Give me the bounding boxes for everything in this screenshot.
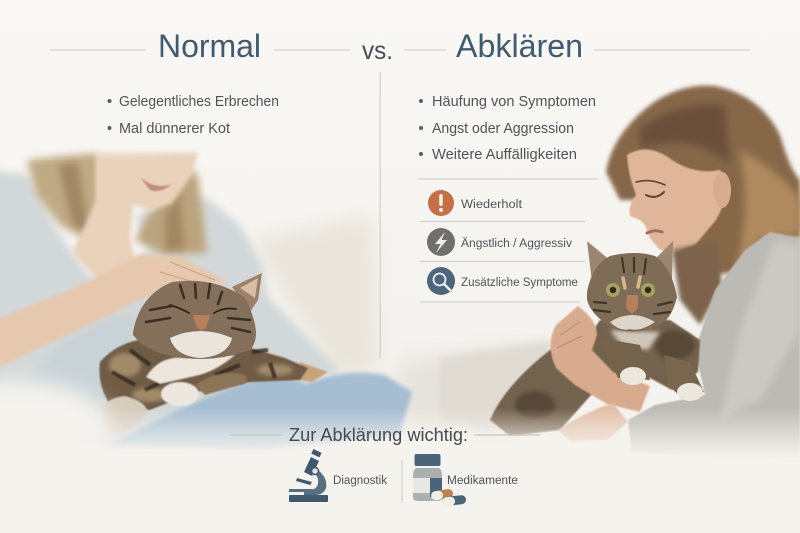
sweater light fold [720, 240, 800, 420]
closed eyes [170, 305, 236, 313]
body stripes [112, 350, 275, 390]
nose [193, 315, 210, 331]
symptom rows [418, 179, 598, 302]
label: Medikamente: Medikamente [447, 475, 518, 487]
label: Ängstlich / Aggressiv: Ängstlich / Aggressiv [461, 238, 572, 250]
finger lines [160, 262, 215, 284]
hair [27, 150, 207, 255]
title: Normal: Normal [158, 28, 261, 64]
muzzle and chin [170, 331, 232, 358]
paw front [161, 382, 199, 406]
lower hand [558, 403, 628, 441]
face [627, 150, 726, 250]
tan paw patch [300, 362, 328, 382]
dark body markings [515, 330, 695, 419]
footer rules [230, 434, 540, 436]
fog at top of the left photo [0, 110, 180, 146]
sofa [440, 340, 552, 430]
fog at lower-left corner [0, 380, 110, 470]
sweater [0, 170, 342, 450]
leg with stripes [195, 373, 247, 395]
center divider [380, 72, 381, 358]
ears [587, 241, 612, 282]
label: Wiederholt: Wiederholt [461, 199, 523, 211]
neck and hair shadow [672, 240, 722, 325]
forearm and hand on the cat [550, 306, 650, 412]
nose and muzzle [610, 315, 655, 330]
label: Diagnostik: Diagnostik [333, 475, 387, 487]
chest [146, 355, 235, 384]
eyes [606, 283, 655, 297]
fog over forehead [20, 108, 250, 152]
head stripes [594, 258, 672, 314]
label: Zusätzliche Symptome: Zusätzliche Symptome [461, 277, 578, 289]
backdrop haze: sofa and wall tint [250, 215, 545, 430]
list: normal signs: Gelegentliches Erbrechen [119, 94, 279, 110]
list: warning signs: Weitere Auffälligkeiten [432, 147, 577, 163]
list: normal signs [108, 94, 279, 137]
icon: exclamation [428, 190, 454, 216]
ear [713, 172, 731, 208]
sweater lower blue fold [20, 315, 140, 430]
eyebrow, eye and lips [636, 181, 665, 233]
list: normal signs: Mal dünnerer Kot [119, 121, 230, 137]
body [490, 320, 700, 436]
paw lower [100, 396, 147, 434]
body tan patches [109, 353, 293, 402]
footer divider [402, 460, 403, 503]
list: warning signs: Häufung von Symptomen [432, 94, 596, 110]
chest [610, 330, 660, 350]
cat: alert tabby [490, 241, 700, 436]
hair highlights [640, 104, 800, 270]
title: vs.: vs. [362, 37, 393, 65]
finger lines [557, 322, 582, 348]
arm and petting hand [0, 254, 228, 372]
ear [232, 273, 262, 312]
footer heading: Zur Abklärung wichtig: [289, 425, 468, 445]
icon: medicine bottle and pills [413, 454, 466, 507]
heading rules [50, 49, 750, 51]
light forehead marks [623, 277, 640, 288]
jeans [110, 373, 412, 450]
cat legs and paws [600, 338, 704, 401]
photo: woman with relaxed cat [0, 108, 412, 470]
head stripes [146, 284, 250, 332]
list: warning signs [419, 94, 596, 163]
cat: relaxed tabby [99, 273, 328, 434]
body [99, 340, 308, 410]
head [587, 253, 677, 332]
title: Abklären: Abklären [456, 28, 583, 64]
fog across the bottom [0, 408, 800, 470]
icon: lightning [427, 228, 455, 256]
face and neck [72, 150, 198, 282]
icon: magnifier [427, 267, 455, 295]
sweater [628, 232, 800, 462]
icon: microscope [289, 449, 328, 502]
list: warning signs: Angst oder Aggression [432, 121, 574, 137]
photo: woman holding alert cat [440, 86, 800, 462]
head [133, 281, 256, 359]
hair back [606, 86, 800, 275]
